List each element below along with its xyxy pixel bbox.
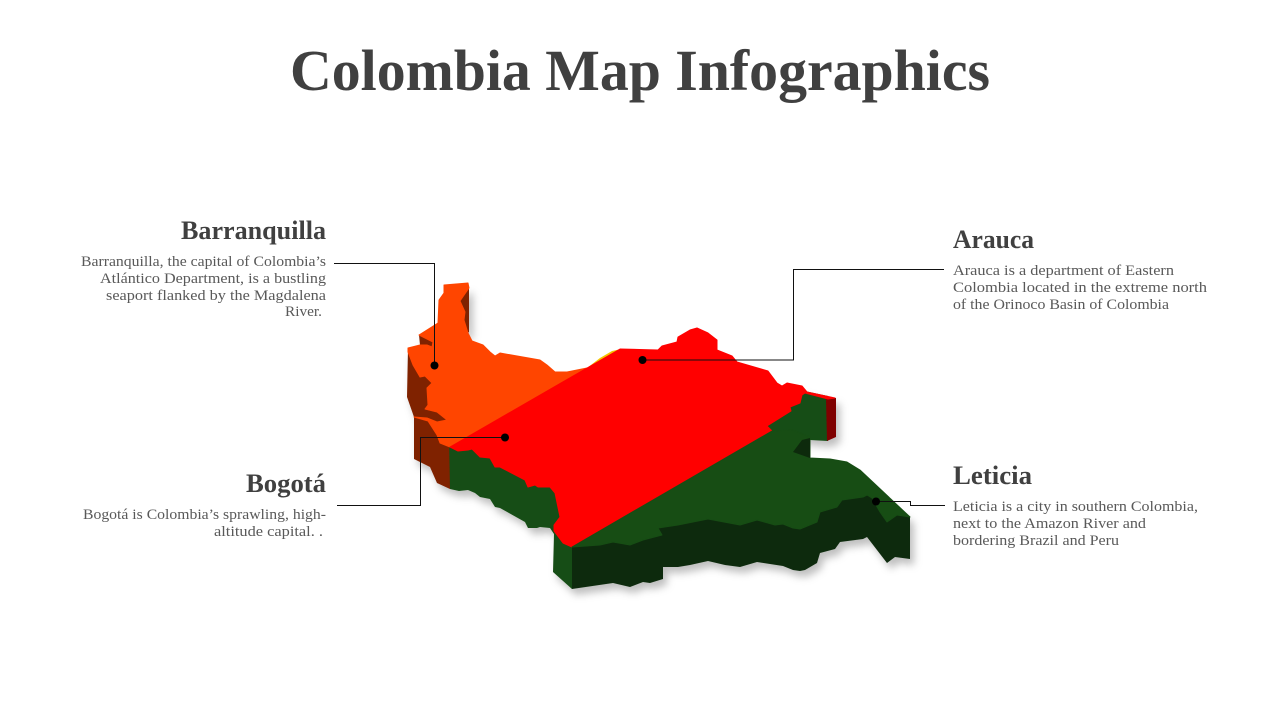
text block: Arauca: Arauca xyxy=(953,225,1034,254)
text block: Barranquilla: seaport flanked by the Magdalena xyxy=(106,288,326,304)
text block: Barranquilla: Barranquilla, the capital of Colombia’s xyxy=(81,254,326,270)
region: red center xyxy=(450,328,835,547)
connector: Leticia xyxy=(872,498,945,506)
text block: Leticia: next to the Amazon River and xyxy=(953,516,1147,532)
text block: Bogota: Bogotá is Colombia’s sprawling, high- xyxy=(83,507,326,523)
dark notch xyxy=(793,438,810,458)
text block: Arauca xyxy=(953,225,1208,313)
region: orange north xyxy=(408,283,587,447)
yellow sliver xyxy=(587,349,621,368)
text block: Barranquilla: Barranquilla xyxy=(181,216,326,245)
connector: Barranquilla xyxy=(334,264,438,370)
text block: Leticia xyxy=(953,461,1198,549)
3D map of Colombia xyxy=(407,283,910,589)
connector: Arauca xyxy=(638,270,944,364)
text block: Barranquilla: Atlántico Department, is a bustling xyxy=(100,271,327,287)
text block: Barranquilla: River. xyxy=(285,304,322,320)
map extruded sides xyxy=(407,286,910,589)
text block: Arauca: Arauca is a department of Eastern xyxy=(953,263,1175,279)
text block: Leticia: Leticia xyxy=(953,461,1032,490)
title: Colombia Map Infographics xyxy=(290,38,990,103)
connector: Bogota xyxy=(337,434,509,506)
text block: Leticia: bordering Brazil and Peru xyxy=(953,533,1120,549)
text block: Bogota xyxy=(83,469,326,540)
text block: Arauca: of the Orinoco Basin of Colombia xyxy=(953,297,1169,313)
text block: Arauca: Colombia located in the extreme north xyxy=(953,280,1208,296)
region: green south xyxy=(572,430,910,547)
text block: Bogota: altitude capital. . xyxy=(214,524,323,540)
text block: Bogota: Bogotá xyxy=(246,469,326,498)
text block: Barranquilla xyxy=(81,216,327,320)
text block: Leticia: Leticia is a city in southern Colombia, xyxy=(953,499,1198,515)
